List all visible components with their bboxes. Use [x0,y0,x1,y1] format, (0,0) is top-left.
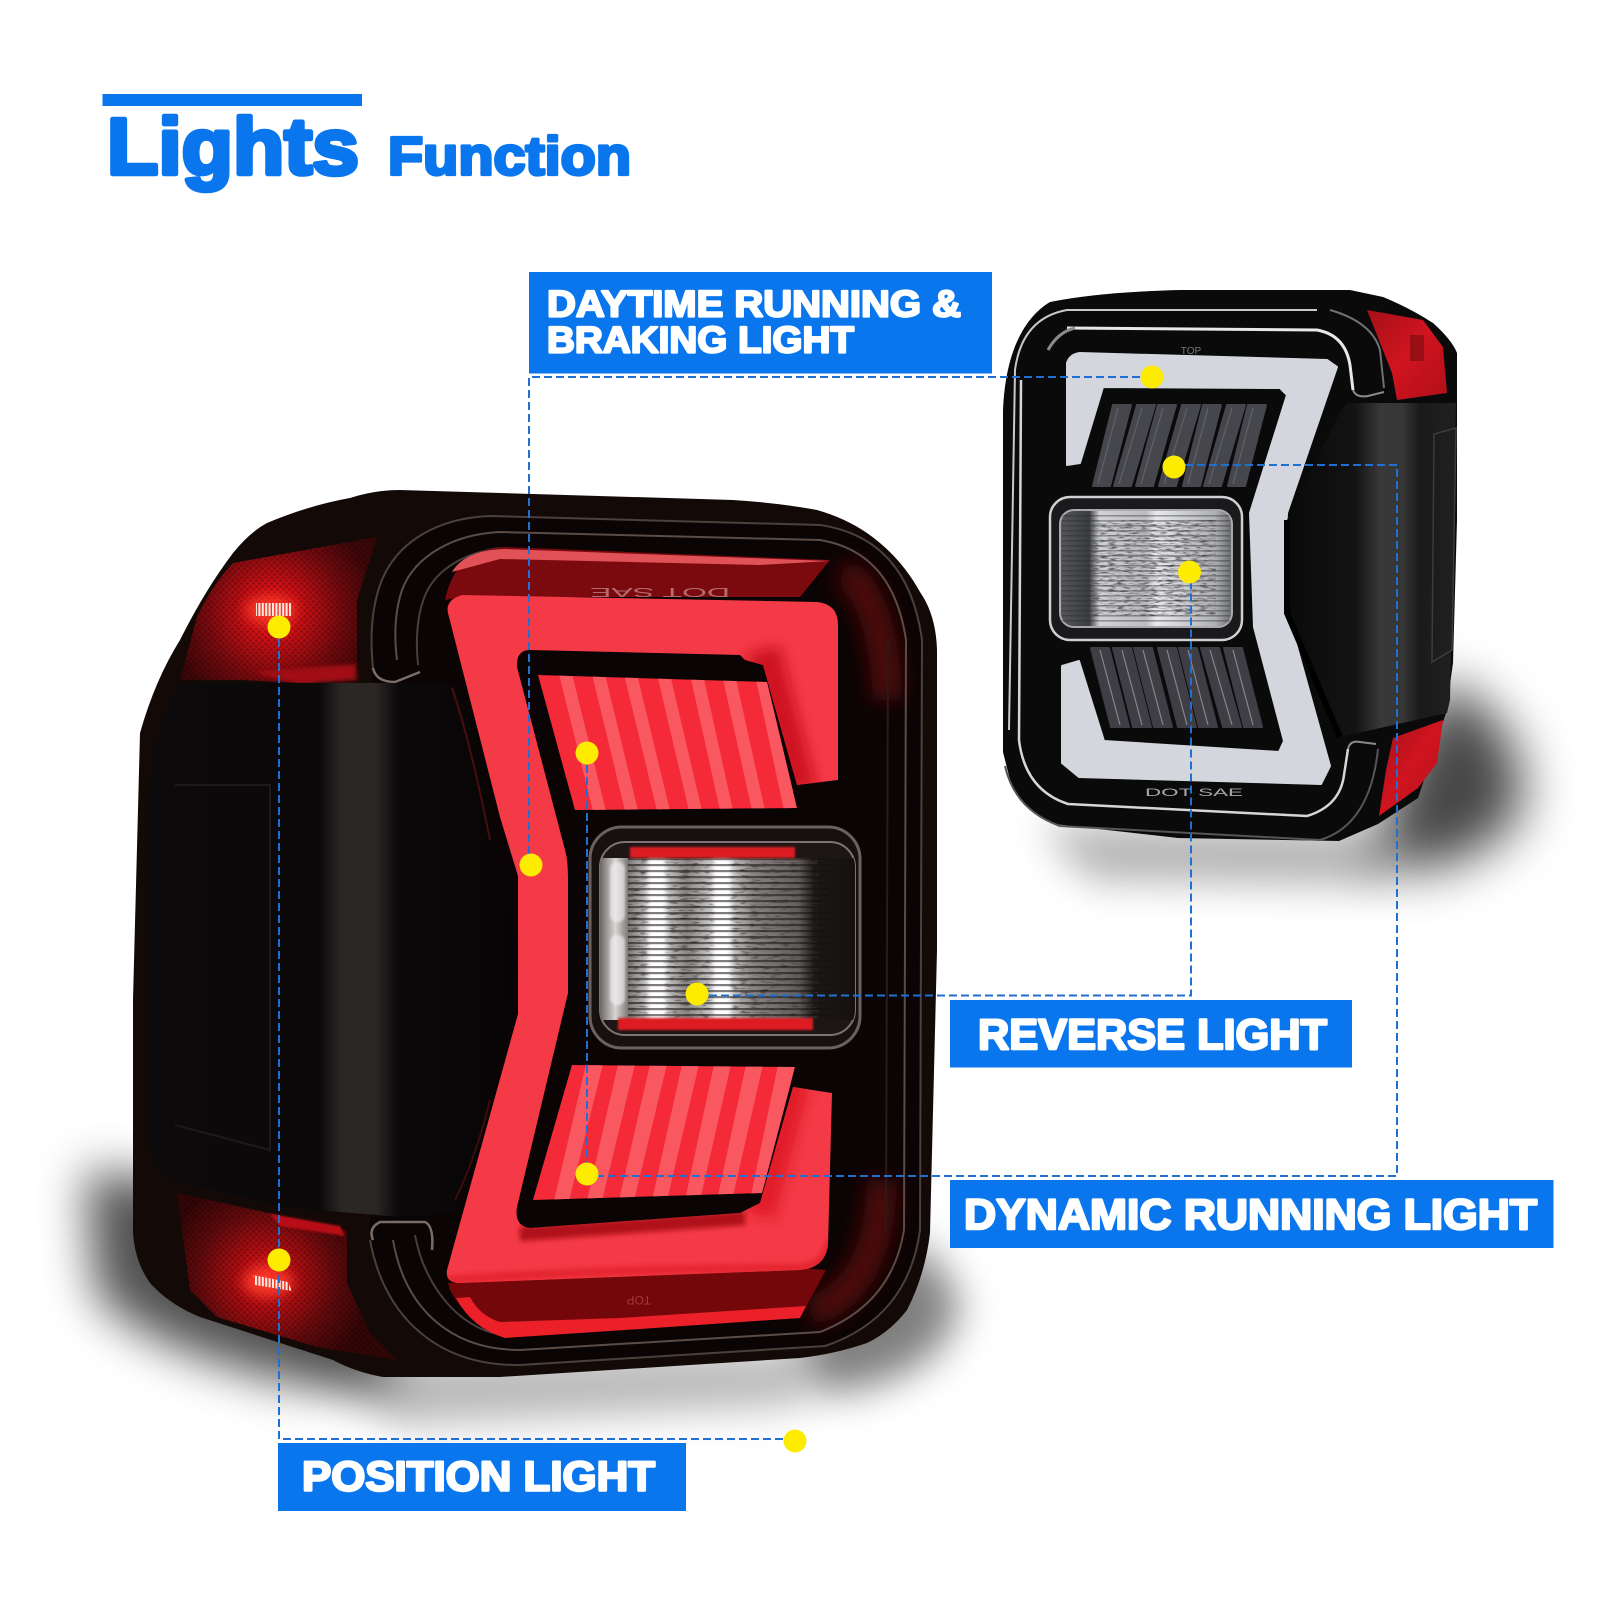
large lamp side housing [147,683,518,1217]
reverse lens, small lamp [1050,497,1242,640]
large tail light, illuminated red [133,490,937,1377]
lower red fins [533,1065,795,1200]
callout connector lines [279,377,1397,1439]
upper position lens [180,537,377,684]
label: position light: POSITION LIGHT [302,1452,655,1500]
connector: daytime running and braking light [529,377,1152,865]
connector: position light [279,627,792,1439]
yellow marker dots [268,366,1201,1452]
small upper fins [1093,405,1266,486]
lower position lens [177,1193,397,1360]
red daytime running light bar [447,595,838,1283]
small fin highlights [1098,408,1253,725]
label: dynamic running light: DYNAMIC RUNNING LIGHT [964,1191,1537,1239]
connector: reverse light [697,572,1191,996]
label: position light [278,1443,686,1511]
top dark red band: DOT SAE [589,585,730,600]
reverse lens, large lamp [590,827,860,1048]
bottom dark red band: TOP [627,1293,651,1307]
title: Function [388,126,631,186]
connector: dynamic running light [587,465,1397,1176]
upper red fins [538,675,797,810]
small lamp top stamp: TOP [1181,346,1202,357]
large lamp ground shadow [85,1170,960,1425]
label: dynamic running light [950,1180,1554,1248]
title: Lights [107,102,359,191]
label: daytime running and braking light: BRAKING LIGHT [547,320,854,360]
top dark red band [445,547,830,600]
small lamp ground shadow [1040,680,1523,885]
small daytime running light bar [1062,353,1337,784]
small lamp lower red lens [1379,720,1443,816]
label: reverse light: REVERSE LIGHT [978,1011,1327,1059]
small tail light, unlit [1003,290,1457,841]
small lamp side housing [1287,403,1456,737]
small lamp frame highlights [1005,310,1384,840]
label: daytime running and braking light: DAYTIME RUNNING & [547,284,961,324]
bottom dark red band [448,1268,826,1338]
red bar shading [448,650,830,1280]
smoked lens frame [370,516,922,1365]
small lamp bottom stamp: DOT SAE [1145,787,1243,799]
small lower fins [1091,648,1262,727]
small lamp upper red lens [1367,310,1447,400]
title [102,94,631,191]
label: daytime running and braking light [529,272,992,374]
lamp outer shell [133,490,937,1377]
small lamp outer shell [1003,290,1457,841]
label: reverse light [950,1000,1352,1068]
